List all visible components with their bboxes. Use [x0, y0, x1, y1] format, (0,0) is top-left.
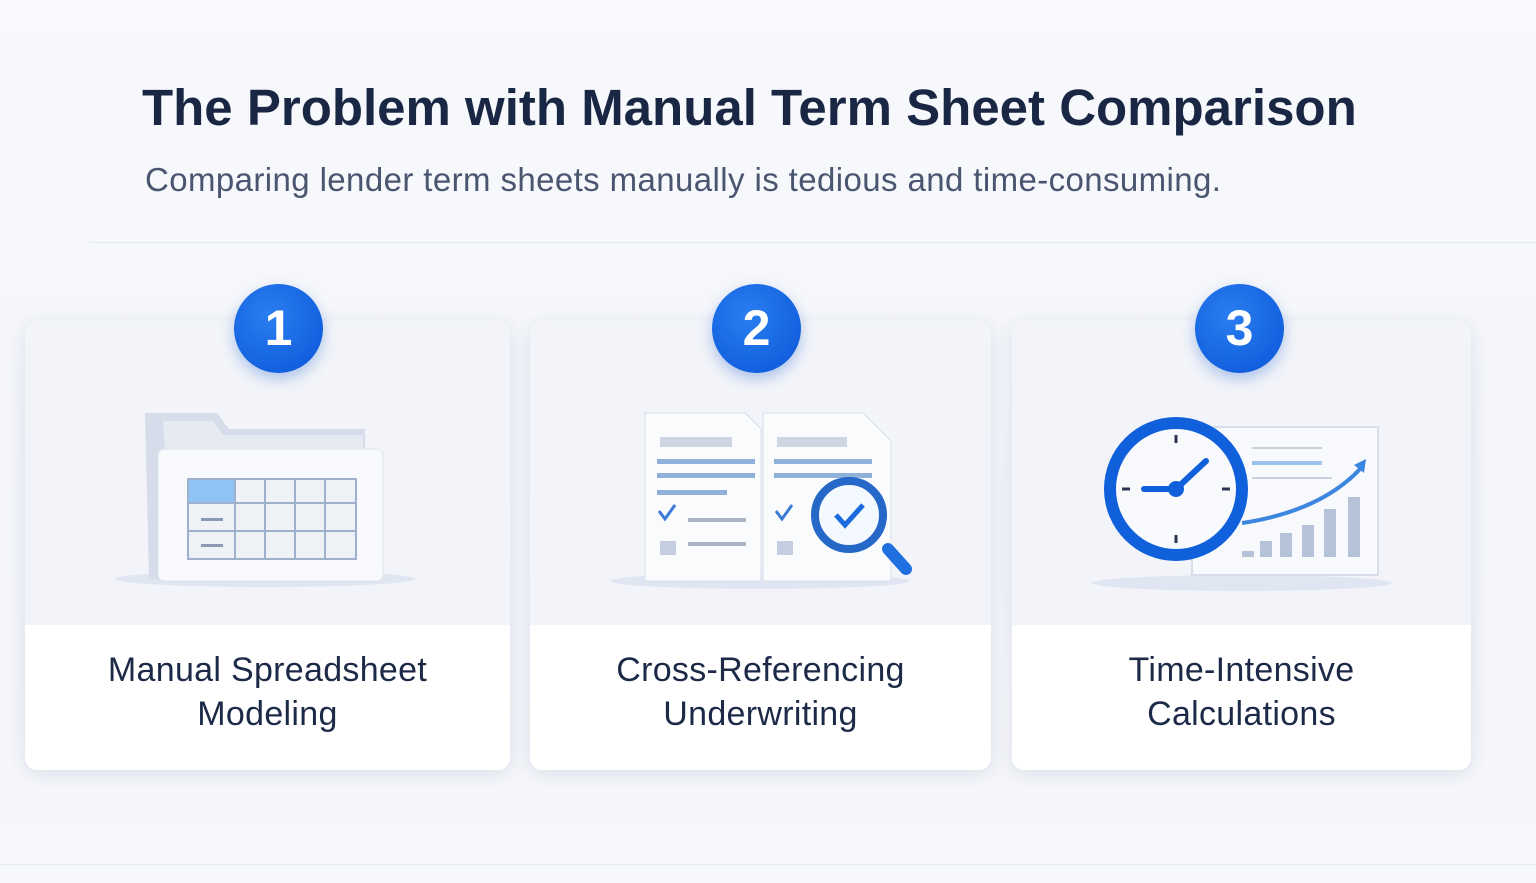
bottom divider [0, 864, 1536, 865]
subtitle: Comparing lender term sheets manually is tedious and time-consuming. [145, 161, 1221, 198]
divider [90, 242, 1536, 243]
icon: clock with chart [1092, 417, 1392, 591]
label: Calculations [1147, 695, 1336, 733]
icon: documents with magnifier [610, 412, 912, 589]
label: Time-Intensive [1129, 651, 1354, 689]
label: Modeling [197, 695, 338, 733]
title: The Problem with Manual Term Sheet Comparison [142, 79, 1357, 136]
panel: cross-referencing [530, 321, 991, 770]
badge 2 [712, 284, 801, 373]
label: Manual Spreadsheet [108, 651, 427, 689]
icon: folder with spreadsheet [115, 413, 415, 587]
panel: time-intensive [1012, 321, 1471, 770]
badge 1: 1 [265, 300, 292, 356]
label: Underwriting [663, 695, 858, 733]
panel: spreadsheet [25, 321, 510, 770]
badge 2: 2 [743, 300, 770, 356]
label [616, 651, 905, 733]
label [108, 651, 427, 733]
badge 1 [234, 284, 323, 373]
badge 3 [1195, 284, 1284, 373]
badge 3: 3 [1226, 300, 1253, 356]
label [1129, 651, 1354, 733]
label: Cross-Referencing [616, 651, 905, 689]
